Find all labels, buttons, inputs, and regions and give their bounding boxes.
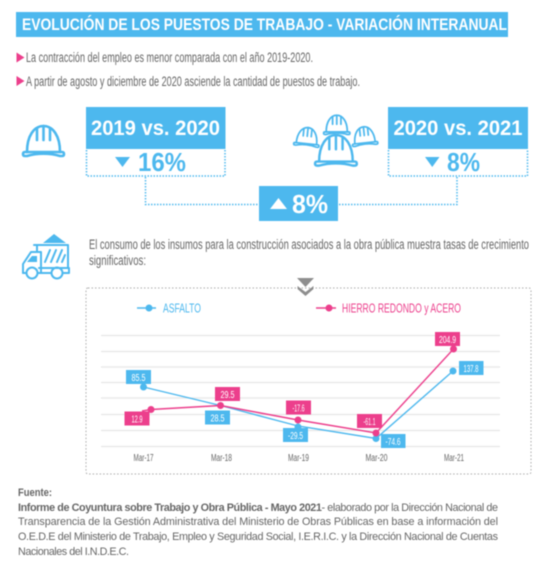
connector: left bbox=[146, 177, 259, 204]
x axis labels bbox=[134, 453, 464, 464]
legend: asfalto: ASFALTO bbox=[163, 300, 201, 316]
series: hierro bbox=[142, 346, 457, 436]
panel: 2020 vs 2021: 2020 vs. 2021 bbox=[394, 117, 523, 140]
x axis labels: Mar-21 bbox=[444, 453, 464, 464]
x axis labels: Mar-17 bbox=[134, 453, 154, 464]
data labels: asfalto: 85.5 bbox=[132, 373, 146, 384]
icon: helmet bbox=[23, 126, 64, 156]
panel: 2019 vs 2020: 2019 vs. 2020 bbox=[91, 117, 220, 140]
data labels: asfalto: -29.5 bbox=[288, 431, 303, 442]
panel: 2019 vs 2020 bbox=[86, 107, 226, 177]
text: materials intro bbox=[89, 237, 529, 268]
data labels: asfalto: -74.6 bbox=[386, 437, 401, 448]
icon: group of helmets bbox=[294, 115, 378, 166]
text: materials intro: significativos: bbox=[89, 253, 146, 268]
source note: Nacionales del I.N.D.E.C. bbox=[18, 546, 129, 558]
source note: Fuente: bbox=[18, 487, 52, 499]
connector: right bbox=[338, 177, 457, 204]
data labels: hierro: 204.9 bbox=[439, 335, 456, 346]
bullet: rise: A partir de agosto y diciembre de 2020 asciende la cantidad de puestos de trabajo. bbox=[26, 74, 360, 89]
chart gridlines bbox=[101, 336, 500, 446]
panel: chart bbox=[86, 278, 531, 474]
data labels: hierro bbox=[124, 332, 460, 428]
panel: 2020 vs 2021: 8% bbox=[447, 147, 480, 177]
panel: total change bbox=[259, 186, 338, 221]
data labels: asfalto: 137.8 bbox=[464, 364, 479, 375]
source note: Transparencia de la Gestión Administrativa del Ministerio de Obras Públicas en base a información del bbox=[18, 516, 498, 528]
bullet: rise bbox=[16, 74, 360, 89]
icon: dump truck bbox=[23, 234, 69, 278]
data labels: hierro: 12.9 bbox=[132, 414, 143, 426]
source note bbox=[18, 487, 499, 558]
panel: total change: 8% bbox=[292, 189, 328, 219]
bullet: contraction: La contracción del empleo es menor comparada con el año 2019-2020. bbox=[26, 50, 313, 65]
panel: 2019 vs 2020: 16% bbox=[138, 147, 186, 177]
legend: asfalto bbox=[137, 300, 201, 316]
data labels: hierro: -61.1 bbox=[364, 417, 376, 428]
x axis labels: Mar-20 bbox=[366, 453, 388, 464]
series: asfalto bbox=[140, 368, 456, 442]
icon: double chevron bbox=[297, 278, 314, 296]
x axis labels: Mar-18 bbox=[211, 453, 232, 464]
bullet: contraction bbox=[16, 50, 313, 65]
legend: hierro: HIERRO REDONDO y ACERO bbox=[342, 300, 461, 316]
data labels: hierro: 29.5 bbox=[220, 390, 235, 401]
source note: O.E.D.E del Ministerio de Trabajo, Empleo y Seguridad Social, I.E.R.I.C. y la Dirección Nacional de Cuentas bbox=[18, 531, 499, 543]
data labels: hierro: -17.6 bbox=[292, 404, 305, 414]
data labels: asfalto bbox=[126, 361, 484, 448]
data labels: asfalto: 28.5 bbox=[210, 414, 225, 424]
title bbox=[16, 12, 508, 37]
x axis labels: Mar-19 bbox=[288, 453, 309, 464]
legend: hierro bbox=[316, 300, 461, 316]
panel: 2020 vs 2021 bbox=[388, 107, 528, 177]
source note: Informe de Coyuntura sobre Trabajo y Obra Pública - Mayo 2021- elaborado por la Dirección Nacional de bbox=[18, 502, 498, 514]
